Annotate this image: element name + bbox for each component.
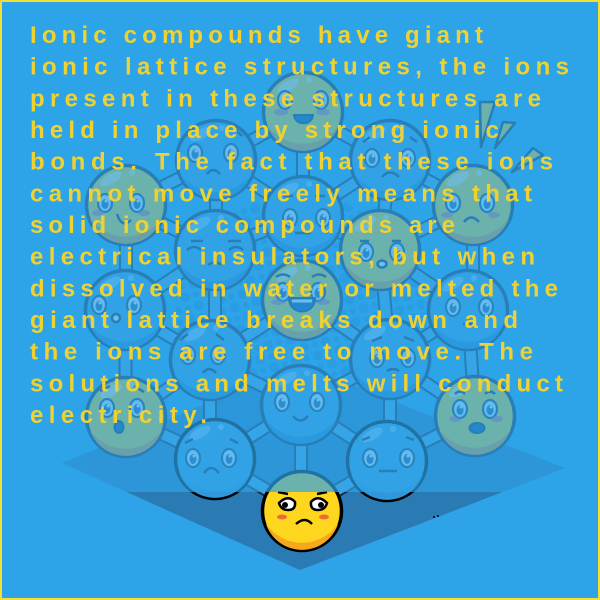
ion: bottom worried yellow, unfaded — [262, 472, 342, 550]
floor shadow — [62, 365, 565, 570]
body text: ionic lattice structures, the ions — [30, 54, 569, 81]
ion: lower-right blue — [350, 320, 430, 398]
lattice bonds — [125, 112, 475, 511]
ion: top happy yellow — [264, 72, 342, 152]
ion: lower-right surprised yellow — [436, 376, 514, 456]
body text — [30, 22, 569, 429]
ion: surprised yellow — [340, 210, 420, 290]
ion: bottom-right neutral blue — [348, 422, 426, 500]
body text: present in these structures are — [30, 85, 541, 112]
body text: dissolved in water or melted the — [30, 275, 558, 302]
body text: held in place by strong ionic — [30, 117, 499, 144]
body text: giant lattice breaks down and — [30, 307, 518, 334]
body text: solutions and melts will conduct — [30, 370, 563, 397]
ion: lower-left worried yellow — [86, 378, 166, 456]
body text: cannot move freely means that — [30, 180, 532, 207]
body text: Ionic compounds have giant — [30, 22, 483, 49]
ion: centre-upper blue — [264, 176, 342, 256]
lattice of ion characters — [86, 72, 514, 550]
body text: bonds. The fact that these ions — [30, 149, 553, 176]
ion: right sad yellow — [434, 166, 512, 244]
body text: solid ionic compounds are — [30, 212, 455, 239]
ion: left smiling yellow — [86, 166, 166, 244]
ion: bottom-left sad blue — [176, 420, 254, 498]
ion: right-middle blue — [428, 270, 508, 350]
halftone dots behind lattice — [175, 195, 425, 445]
spark marks — [480, 102, 543, 172]
ion: centre-lower smiling blue — [262, 366, 340, 444]
ion: upper-right sad blue — [350, 120, 430, 200]
ion: squinting blue — [176, 210, 254, 290]
ion: centre laughing yellow — [262, 260, 342, 340]
ion: left-middle blue — [86, 270, 164, 350]
body text: electrical insulators, but when — [30, 244, 535, 271]
body text: the ions are free to move. The — [30, 339, 533, 366]
ion: upper-left sad blue — [176, 120, 256, 200]
body text: electricity. — [30, 402, 207, 429]
tiny specks — [433, 515, 439, 518]
ion: lower-left sad blue — [170, 320, 250, 400]
